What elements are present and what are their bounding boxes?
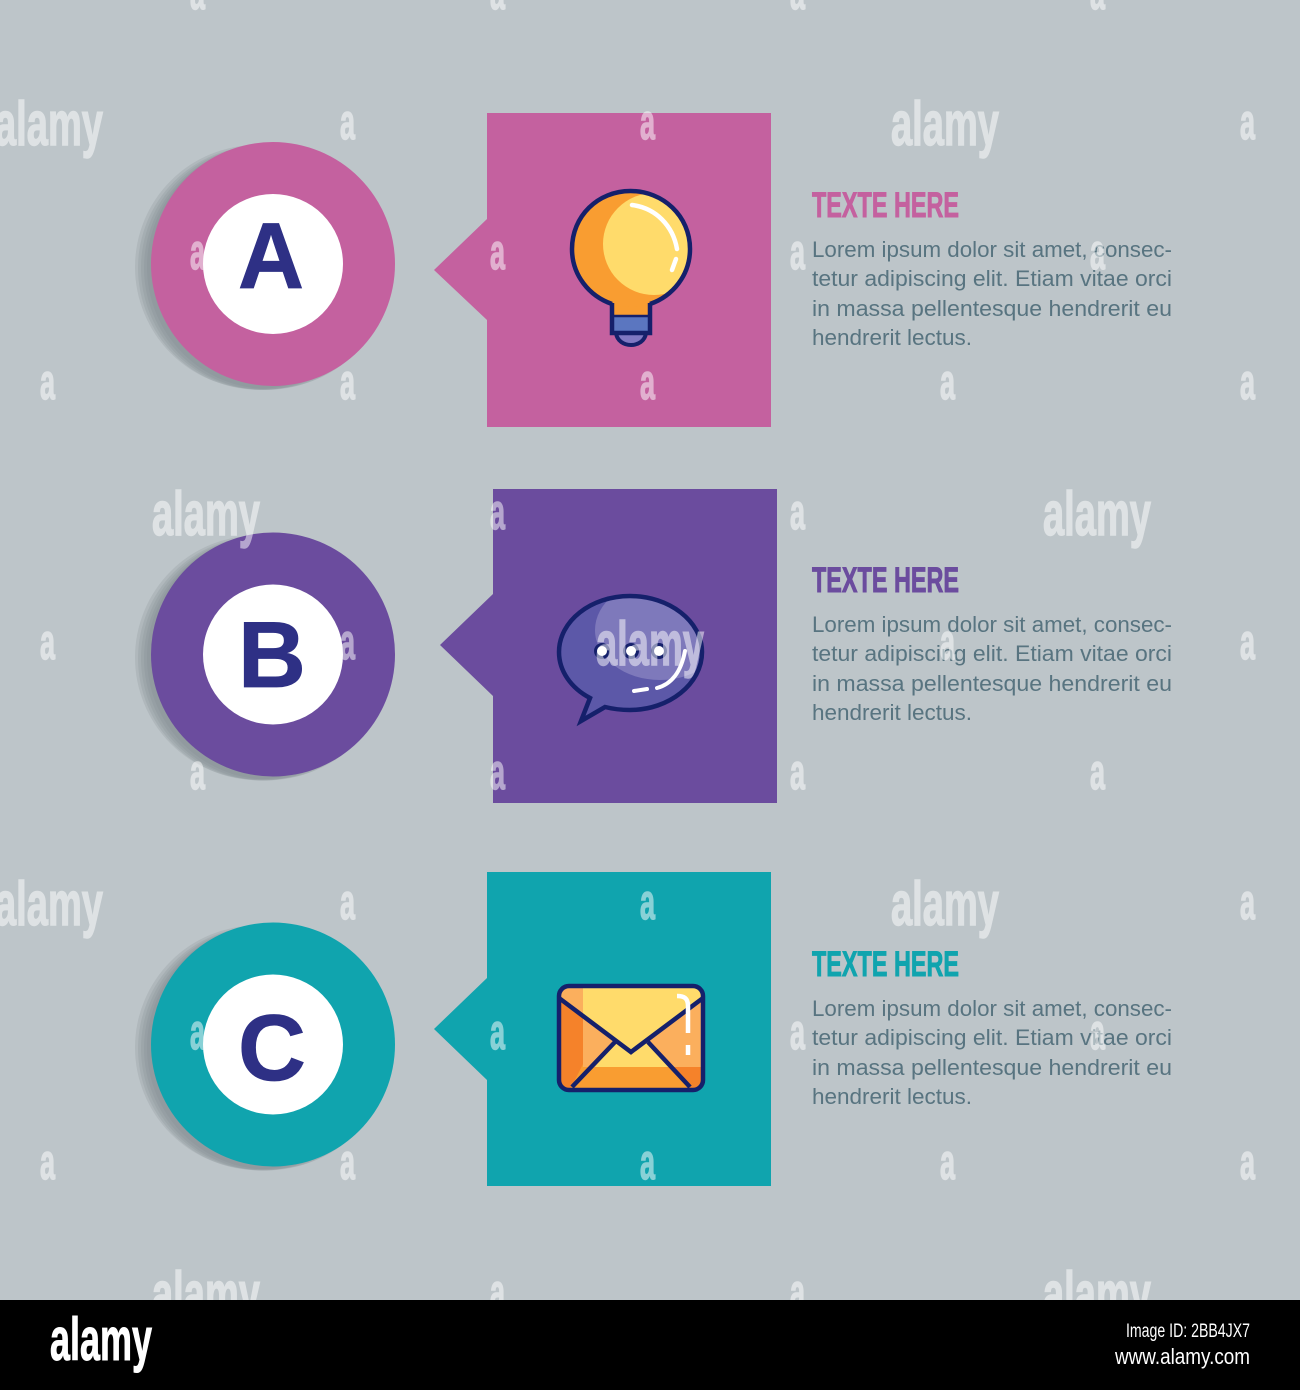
watermark overlay: alamy: [152, 480, 260, 549]
icon: light bulb: [572, 191, 705, 345]
body text B: tetur adipiscing elit. Etiam vitae orci: [812, 641, 1172, 666]
footer bar: [0, 1300, 1300, 1390]
body text A: in massa pellentesque hendrerit eu: [812, 296, 1172, 321]
body text C: in massa pellentesque hendrerit eu: [812, 1055, 1172, 1080]
body text A: tetur adipiscing elit. Etiam vitae orci: [812, 266, 1172, 291]
heading B: TEXTE HERE: [812, 561, 959, 600]
watermark overlay: a: [940, 1134, 956, 1190]
watermark overlay: a: [40, 354, 56, 410]
watermark overlay: alamy: [0, 870, 103, 939]
callout square C: [434, 872, 771, 1186]
footer logo: alamy: [50, 1306, 152, 1373]
watermark overlay: alamy: [152, 1260, 260, 1329]
watermark overlay: a: [490, 744, 506, 800]
circle badge B: B: [238, 602, 306, 707]
body text A: Lorem ipsum dolor sit amet, consec-: [812, 237, 1172, 262]
watermark overlay: a: [1240, 94, 1256, 150]
body text A: [812, 237, 1172, 350]
watermark overlay: a: [490, 224, 506, 280]
circle badge B: [135, 532, 395, 780]
watermark overlay: a: [1090, 744, 1106, 800]
watermark overlay: alamy: [0, 90, 103, 159]
watermark overlay: a: [640, 1134, 656, 1190]
watermark overlay: a: [640, 94, 656, 150]
watermark overlay: a: [640, 354, 656, 410]
watermark overlay: a: [340, 354, 356, 410]
watermark overlay: a: [40, 614, 56, 670]
panel: row C: [135, 872, 1172, 1186]
heading A: TEXTE HERE: [812, 186, 959, 225]
watermark overlay: a: [790, 1264, 806, 1320]
callout square B: [440, 489, 777, 803]
watermark overlay: a: [190, 744, 206, 800]
body text C: hendrerit lectus.: [812, 1084, 972, 1109]
icon: envelope: [559, 986, 703, 1090]
icon: speech bubble: [556, 594, 704, 726]
watermark overlay: a: [790, 1004, 806, 1060]
watermark overlay: a: [340, 1134, 356, 1190]
circle badge A: [135, 142, 395, 390]
watermark overlay: a: [790, 744, 806, 800]
watermark overlay: alamy: [1043, 480, 1151, 549]
watermark overlay: a: [340, 874, 356, 930]
watermark overlay: alamy: [891, 90, 999, 159]
watermark overlay: a: [1240, 874, 1256, 930]
website: www.alamy.com: [1114, 1344, 1250, 1369]
watermark overlay: alamy: [596, 610, 704, 679]
watermark overlay: alamy: [1043, 1260, 1151, 1329]
body text C: tetur adipiscing elit. Etiam vitae orci: [812, 1025, 1172, 1050]
watermark overlay: a: [490, 1264, 506, 1320]
watermark overlay: a: [340, 94, 356, 150]
watermark overlay: a: [190, 224, 206, 280]
watermark overlay: a: [790, 224, 806, 280]
body text C: Lorem ipsum dolor sit amet, consec-: [812, 996, 1172, 1021]
circle badge C: [135, 922, 395, 1170]
image id: Image ID: 2BB4JX7: [1126, 1321, 1250, 1342]
body text B: hendrerit lectus.: [812, 700, 972, 725]
body text B: in massa pellentesque hendrerit eu: [812, 671, 1172, 696]
body text B: Lorem ipsum dolor sit amet, consec-: [812, 612, 1172, 637]
watermark overlay: a: [190, 1004, 206, 1060]
watermark overlay: a: [340, 614, 356, 670]
watermark overlay: alamy: [891, 870, 999, 939]
watermark overlay: a: [940, 354, 956, 410]
circle badge A: A: [238, 203, 304, 308]
watermark overlay: a: [490, 484, 506, 540]
watermark overlay: a: [940, 614, 956, 670]
body text C: [812, 996, 1172, 1109]
panel: row A: [135, 113, 1172, 427]
watermark overlay: a: [1090, 224, 1106, 280]
panel: row B: [135, 489, 1172, 803]
watermark overlay: a: [1240, 354, 1256, 410]
watermark overlay: a: [1240, 614, 1256, 670]
watermark overlay: a: [490, 1004, 506, 1060]
watermark overlay: a: [40, 1134, 56, 1190]
body text B: [812, 612, 1172, 725]
circle badge C: C: [238, 995, 306, 1100]
watermark overlay: a: [640, 874, 656, 930]
watermark overlay: a: [1240, 1134, 1256, 1190]
callout square A: [434, 113, 771, 427]
watermark overlay: a: [790, 484, 806, 540]
watermark overlay: a: [1090, 1004, 1106, 1060]
heading C: TEXTE HERE: [812, 945, 959, 984]
body text A: hendrerit lectus.: [812, 325, 972, 350]
